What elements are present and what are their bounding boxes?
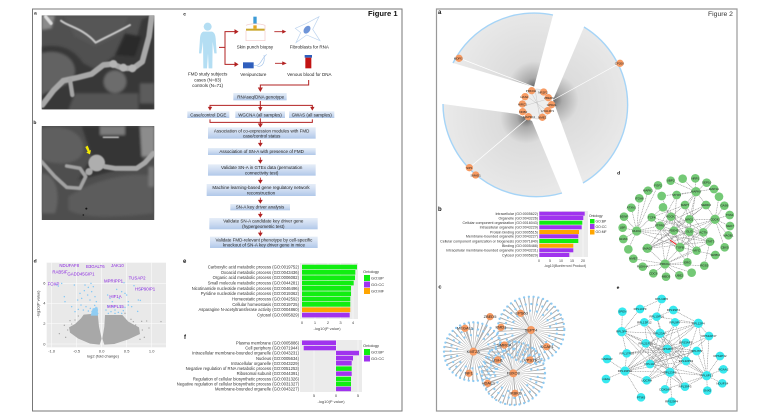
- gene labels: [619, 176, 734, 279]
- box: case control DGE: Case/control DGE: [190, 112, 226, 117]
- bars: [302, 265, 357, 317]
- node labels: SIP1: [466, 166, 473, 170]
- category labels: Negative regulation of cellular biosynthetic process (GO:0031327): [177, 382, 300, 386]
- gene labels: NDUFAF8: [59, 263, 80, 268]
- node labels: CP200: [615, 62, 624, 66]
- gene labels: USH1: [492, 357, 504, 362]
- gene labels: TNS1: [726, 213, 734, 217]
- gene labels: RPL12P4: [692, 321, 705, 325]
- category labels: Membrane-bounded organelle (GO:0043227): [466, 235, 538, 239]
- gene labels: UBP2: [667, 179, 675, 183]
- legend: [363, 343, 384, 362]
- panel letter c: c: [183, 12, 186, 18]
- panel e: enrichment bar chart: [183, 259, 385, 331]
- panel a: CT angiogram image: [34, 11, 154, 113]
- gene labels: ATXN1: [627, 206, 636, 210]
- cyan nodes: [602, 295, 728, 406]
- panel letter a: a: [438, 10, 442, 16]
- gene labels: RHOA: [632, 229, 641, 233]
- box: GWAS: [289, 111, 334, 118]
- panel letter b: b: [33, 120, 36, 126]
- gene labels: FBXO8: [507, 371, 521, 376]
- icon: yellow arrow: [85, 146, 91, 154]
- box: association of SN-A: Association of SN-A with presence of FMD: [219, 149, 305, 154]
- label: venous blood: Venous blood for DNA: [287, 72, 332, 77]
- gene labels: SNX5: [703, 389, 712, 393]
- gene labels: PTPRG: [655, 224, 666, 228]
- label: study subjects: FMD study subjects: [188, 72, 227, 77]
- panel c: study flowchart: [183, 12, 334, 248]
- gene labels: PRKCA: [660, 262, 670, 266]
- grey non-significant points: [69, 313, 140, 345]
- gene labels: RPL3P4: [616, 330, 628, 334]
- figure 2 panel c: three-hub gene network: [438, 285, 564, 405]
- category labels: Negative regulation of RNA metabolic process (GO:0051253): [186, 366, 300, 371]
- gene labels: IKBKB: [510, 391, 522, 396]
- arrow: [259, 140, 262, 146]
- box: knockout validation: [210, 237, 318, 248]
- gene labels: RGS5: [700, 264, 709, 268]
- box: validate key driver: [209, 218, 318, 229]
- red key edge: [670, 240, 679, 247]
- box: key driver analysis: SN-A key driver analysis: [236, 205, 285, 210]
- axis title: -log10(Bonferroni Product): [544, 264, 586, 268]
- gene labels: TUSAP2: [129, 275, 146, 280]
- gene labels: RPS2P32: [713, 354, 727, 358]
- hub-to-rim gaps: [459, 58, 620, 168]
- category labels: [192, 264, 300, 318]
- gene labels: TCF4: [648, 215, 656, 219]
- ticks: 5: [549, 259, 551, 263]
- panel: Figure 1 frame: [32, 9, 402, 411]
- gene labels: MAOB1: [723, 233, 734, 237]
- arrows: split to biopsy and venipuncture: [219, 30, 238, 66]
- legend: GO:BP: [371, 350, 384, 354]
- arrow: [259, 178, 262, 183]
- gene labels: MAPK8: [691, 190, 701, 194]
- gene labels: MEGAL1: [457, 326, 474, 331]
- node labels: PRKCH: [526, 89, 536, 93]
- gene labels: NME7: [629, 257, 638, 261]
- axis title: -log10(P value): [313, 326, 341, 331]
- node labels: ZBED6: [544, 96, 554, 100]
- node labels: MAP3K4: [523, 115, 535, 119]
- box: WGCNA: [235, 111, 285, 118]
- axis ticks: 4: [43, 301, 46, 306]
- gene labels: RPL13P12: [637, 320, 652, 324]
- gene labels: RPL39P3: [679, 385, 692, 389]
- gene labels: CDC42: [710, 217, 720, 221]
- orange gene nodes: [461, 310, 550, 397]
- gene labels: MAP1A: [709, 187, 719, 191]
- ticks: [538, 259, 585, 263]
- gene labels: [48, 263, 156, 309]
- gene labels: UBE2: [675, 273, 684, 277]
- arrow: venipuncture to blood: [275, 62, 286, 65]
- title: Figure 1: Figure 1: [368, 9, 398, 18]
- legend: Ontology: [363, 269, 379, 274]
- category labels: Pyridine nucleotide metabolic process (GO:0019362): [201, 291, 300, 296]
- gene labels: HSP90IP1: [135, 287, 156, 292]
- box: case control DGE: [187, 111, 229, 118]
- gene labels: STAT3: [706, 240, 715, 244]
- gene labels: RPS29P4: [665, 400, 679, 404]
- label: fibroblasts: Fibroblasts for RNA: [290, 45, 329, 50]
- box: machine learning: Machine learning-based gene regulatory network: [212, 185, 310, 190]
- arrow: [259, 212, 262, 217]
- legend: GO:MF: [371, 288, 385, 294]
- node labels: HIRC3: [518, 102, 527, 106]
- category labels: Ribosomal subunit (GO:0044391): [237, 371, 300, 376]
- gene labels: MRPL15: [107, 304, 124, 309]
- category labels: Nicotinamide nucleotide metabolic process (GO:0046496): [192, 286, 300, 291]
- gene labels: MBD3: [662, 275, 670, 279]
- legend: GO:BP: [596, 220, 607, 224]
- gene labels: RPS3AP47: [701, 334, 717, 338]
- box: association of SN-A: [208, 148, 316, 155]
- box: validate in GTEx: Validate SN-A in GTEx data (permutation: [221, 165, 302, 170]
- axis ticks: 0.5: [124, 348, 130, 353]
- category labels: Homeostatic process (GO:0042592): [232, 296, 300, 302]
- gene labels: PLEKHA: [637, 265, 649, 269]
- panel letter d: d: [617, 171, 620, 177]
- arrows: merge to association: [210, 118, 312, 127]
- gene labels: NEK7: [726, 224, 734, 228]
- box: machine learning: [207, 184, 316, 196]
- gene labels: ERG: [684, 260, 691, 264]
- icon: human figure: [199, 23, 217, 68]
- gene labels: RPL10P6: [655, 297, 668, 301]
- y axis title: -log10(P value): [36, 290, 41, 317]
- gene labels: RPL19P12: [618, 369, 633, 373]
- category labels: Cellular component organization or biogenesis (GO:0071840): [440, 239, 538, 243]
- axis title: -log10(P value): [317, 399, 345, 404]
- gene labels: ndufa: [602, 377, 610, 381]
- ticks: 4: [352, 320, 355, 325]
- box: RNAseq/DNA genotype: [233, 93, 287, 100]
- gene labels: COX5AP: [659, 387, 671, 391]
- gene labels: GADD45GIP1: [67, 271, 95, 276]
- gene labels: GLI3: [686, 230, 693, 234]
- gene labels: RPL17P50: [619, 351, 634, 355]
- gene labels: MAPT: [681, 203, 689, 207]
- icon: blood tube: [305, 55, 312, 68]
- legend: [363, 269, 385, 294]
- ticks: 10: [559, 259, 563, 263]
- gene labels: BDNF: [620, 215, 628, 219]
- category labels: Protein binding (GO:0005515): [490, 230, 538, 234]
- title: Figure 2: Figure 2: [708, 11, 733, 18]
- node labels: [454, 57, 624, 177]
- blue significant points: [57, 283, 142, 313]
- gene labels: UQCRH: [641, 378, 652, 382]
- gene labels: CDC6: [649, 271, 658, 275]
- category labels: [440, 212, 538, 257]
- axis ticks: -1.0: [48, 348, 56, 353]
- category labels: Intracellular organelle (GO:0043229): [231, 361, 300, 366]
- gene labels: LBR: [620, 226, 626, 230]
- gene labels: KMT2A: [467, 349, 480, 354]
- axis ticks: 6: [43, 281, 46, 286]
- ticks: 1: [314, 320, 317, 325]
- gene labels: ITGA8: [635, 196, 644, 200]
- ticks: 20: [581, 259, 585, 263]
- panel letter d: d: [34, 259, 37, 265]
- fan: right: [553, 27, 628, 183]
- category labels: Asparagine N-acetyltransferase activity (GO:0004860): [198, 307, 300, 312]
- network edges: [623, 178, 730, 277]
- rim arcs: [443, 13, 628, 197]
- gene labels: PDE4D: [669, 229, 680, 233]
- ticks: 0: [301, 320, 304, 325]
- panel letter e: e: [617, 285, 620, 291]
- category labels: Small molecule metabolic process (GO:0044281): [208, 280, 300, 286]
- panel letter c: c: [438, 285, 441, 291]
- category labels: Nucleus (GO:0005634): [256, 356, 300, 361]
- axis ticks: [43, 281, 155, 353]
- arrow: blood to genotype: [259, 80, 309, 91]
- category labels: Oxoacid metabolic process (GO:0043436): [221, 270, 300, 275]
- panel: Figure 2 frame: [436, 9, 737, 411]
- gene labels: FGF2: [654, 183, 662, 187]
- gene labels: B3GALT6: [86, 264, 105, 269]
- bars: [539, 212, 585, 257]
- box: knockout validation: Validate FMD-relevant phenotype by cell-specific: [216, 237, 312, 242]
- panel letter e: e: [183, 259, 187, 265]
- panel letter b: b: [438, 207, 442, 213]
- ticks: 0: [538, 259, 540, 263]
- category labels: Membrane-bounded organelle (GO:0043227): [215, 386, 300, 392]
- gene labels: SRPK2: [710, 253, 721, 257]
- orange gene nodes: [455, 55, 624, 179]
- legend: GO:CC: [596, 225, 607, 229]
- gene labels: SCAP1: [541, 344, 555, 349]
- gene labels: RPS3AP5: [679, 341, 693, 345]
- gene labels: RGAA2: [718, 367, 729, 371]
- blue leaf nodes: [444, 297, 564, 405]
- gene labels: GNRHR: [602, 357, 613, 361]
- ticks: 15: [570, 259, 574, 263]
- gene labels: NF1: [465, 371, 474, 376]
- category labels: Cytosol (GO:0005829): [257, 312, 300, 318]
- box: association of modules: case/control status: [243, 134, 281, 139]
- fan: upper left: [453, 13, 553, 87]
- node labels: DDB2: [519, 110, 528, 114]
- gene labels: VPS13C: [524, 357, 539, 362]
- gene labels: RPL9SP4: [667, 308, 680, 312]
- box: GWAS: GWAS (all samples): [292, 112, 332, 117]
- gene labels: RPL7P9: [691, 349, 703, 353]
- gene labels: SEPT4: [525, 327, 538, 332]
- gene labels: GNAS: [619, 237, 628, 241]
- arrow: [259, 198, 262, 203]
- hub core: [522, 89, 552, 119]
- gene labels: HDAC1: [482, 381, 496, 386]
- network edges: [606, 299, 723, 402]
- gene labels: ACTN: [699, 230, 707, 234]
- gene labels: RPL6P13: [700, 374, 713, 378]
- figure 2 panel d: green gene network: [617, 171, 734, 281]
- box: WGCNA: WGCNA (all samples): [238, 112, 282, 117]
- box: validate in GTEx: [208, 164, 316, 176]
- gene labels: NRP1: [691, 176, 700, 180]
- ticks: [313, 393, 360, 398]
- gene labels: RPL9P7: [669, 320, 681, 324]
- label: skin punch biopsy: Skin punch biopsy: [237, 44, 274, 49]
- gene labels: ZBED5: [484, 314, 497, 319]
- bars: [302, 340, 359, 391]
- category labels: [177, 340, 300, 392]
- legend: GO:MF: [596, 230, 607, 234]
- node labels: NR2F2: [538, 90, 548, 94]
- gene labels: GAS6: [720, 204, 729, 208]
- node labels: SMAD1: [471, 173, 481, 177]
- category labels: Cytosol (GO:0005829): [502, 253, 538, 257]
- axis ticks: 0: [43, 342, 46, 347]
- gene labels: RPL21P28: [638, 341, 653, 345]
- box: knockout validation: knockout of SN-A key driver gene in mice: [223, 243, 305, 248]
- ticks: 0: [335, 393, 338, 398]
- green nodes: [618, 174, 734, 281]
- gene labels: NDUFS4: [716, 381, 729, 385]
- legend: Ontology: [363, 343, 379, 348]
- ticks: [301, 320, 355, 325]
- fan: lower left: [443, 104, 562, 197]
- box: key driver analysis: [230, 204, 290, 210]
- axis titles: log2 (fold change): [87, 354, 120, 359]
- legend: Ontology: [589, 214, 603, 218]
- ticks: 5: [357, 393, 360, 398]
- gene labels: RAB5IF: [52, 270, 68, 275]
- gene labels: NEDD4: [701, 203, 711, 207]
- legend: GO:BP: [371, 276, 384, 280]
- icon: venipuncture syringe: [243, 54, 267, 68]
- label: study subjects: controls (N=71): [192, 83, 224, 88]
- category labels: Plasma membrane (GO:0005886): [236, 340, 300, 345]
- gene labels: MYO9: [672, 193, 681, 197]
- arrow: biopsy to fibroblasts: [274, 30, 285, 33]
- gene labels: [602, 297, 729, 404]
- axis ticks: 1.0: [149, 348, 155, 353]
- gene labels: TGFB: [676, 245, 684, 249]
- gene labels: FOXP: [48, 281, 60, 286]
- category labels: Binding (GO:0005488): [502, 244, 538, 248]
- gene labels: MAPK1: [643, 189, 653, 193]
- legend: GO:CC: [371, 356, 384, 361]
- panel letter f: f: [184, 335, 187, 341]
- panel b: CT angiogram with aneurysm: [33, 120, 154, 220]
- icon: fibroblast cell: [295, 17, 320, 43]
- category labels: Carboxylic acid metabolic process (GO:0019752): [208, 264, 300, 270]
- ticks: 5: [313, 393, 316, 398]
- gene labels: SPEN: [618, 310, 626, 314]
- gene labels: JAK10: [111, 263, 124, 268]
- node labels: HAS2: [520, 95, 529, 99]
- panel d: volcano plot: [34, 259, 166, 359]
- panel letter a: a: [34, 11, 37, 17]
- panel f: enrichment bar chart: [177, 335, 384, 404]
- box: validate key driver: Validate SN-A candidate key driver gene: [223, 219, 303, 224]
- category labels: Intracellular (GO:0005622): [495, 212, 538, 216]
- category labels: Intracellular membrane-bounded organelle (GO:0043231): [446, 249, 538, 253]
- category labels: Organelle (GO:0043226): [498, 216, 538, 220]
- box: association of modules: Association of co-expression modules with FMD: [214, 128, 309, 133]
- node labels: GPD2L: [547, 103, 557, 107]
- gene labels: NRG1: [685, 217, 694, 221]
- label: study subjects: cases (N=83): [194, 77, 222, 82]
- gene labels: ROCK1: [666, 215, 676, 219]
- gene labels: EPS60: [515, 311, 529, 316]
- gene labels: SEP10: [702, 181, 712, 185]
- gene labels: HIF1A: [109, 294, 122, 299]
- arrow: [259, 231, 262, 236]
- arrows: branch to three analyses: [209, 101, 314, 110]
- gene labels: CBX5: [721, 245, 729, 249]
- figure 2 panel a: radial network: [438, 10, 628, 197]
- node labels: NME2: [538, 116, 547, 120]
- legend: GO:CC: [371, 282, 384, 287]
- label: venipuncture: Venipuncture: [240, 72, 267, 77]
- category labels: Cell periphery (GO:0071944): [245, 346, 300, 351]
- ticks: 2: [327, 320, 330, 325]
- box: validate in GTEx: connectivity test): [245, 170, 279, 175]
- arrow: [259, 157, 262, 163]
- category labels: Intracellular organelle (GO:0043229): [480, 226, 538, 230]
- figure 2 panel b: enrichment bar chart: [438, 207, 607, 268]
- category labels: Intracellular membrane-bounded organelle (GO:0043231): [192, 351, 300, 356]
- node labels: MDFI1: [454, 57, 463, 61]
- category labels: Cellular homeostasis (GO:0019725): [232, 302, 300, 307]
- icon: skin punch biopsy: [246, 17, 265, 41]
- category labels: Cellular component organization (GO:0016043): [462, 221, 538, 225]
- gene labels: SMAD3: [642, 246, 653, 250]
- axis ticks: -0.5: [73, 348, 81, 353]
- gene labels: MPRIPP1: [104, 278, 124, 283]
- category labels: Organic acid metabolic process (GO:0006082): [213, 275, 300, 280]
- gene labels: RPS3P6: [662, 347, 673, 351]
- gene labels: SMRCA: [497, 342, 512, 347]
- node labels: HYAL3P1: [541, 109, 554, 113]
- gene labels: MYC: [693, 249, 701, 253]
- box: machine learning: reconstruction: [247, 190, 276, 195]
- gene labels: RPL23AP: [653, 331, 667, 335]
- box: validate key driver: (hypergeometric test): [242, 224, 285, 229]
- category labels: Regulation of cellular biosynthetic process (GO:0031326): [193, 376, 300, 382]
- gene labels: RPL10P16: [649, 315, 664, 319]
- gene labels: RPL13A: [644, 362, 656, 366]
- ticks: 3: [339, 320, 342, 325]
- axis ticks: 0.0: [99, 348, 105, 353]
- gene labels: KMD1: [495, 325, 507, 330]
- axis ticks: 2: [43, 321, 46, 326]
- spokes: [459, 313, 548, 393]
- box: RNAseq/DNA genotype: RNAseq/DNA genotype: [237, 94, 285, 99]
- gene labels: [457, 311, 555, 396]
- gene labels: PTMS: [637, 395, 645, 399]
- box: association of modules: [208, 127, 316, 139]
- gene labels: RPL23P8: [664, 370, 677, 374]
- gene labels: RPL10P9: [634, 307, 647, 311]
- legend: [589, 214, 607, 234]
- gene labels: RPL22P19: [679, 359, 694, 363]
- figure 2 panel e: cyan gene network: [602, 285, 729, 406]
